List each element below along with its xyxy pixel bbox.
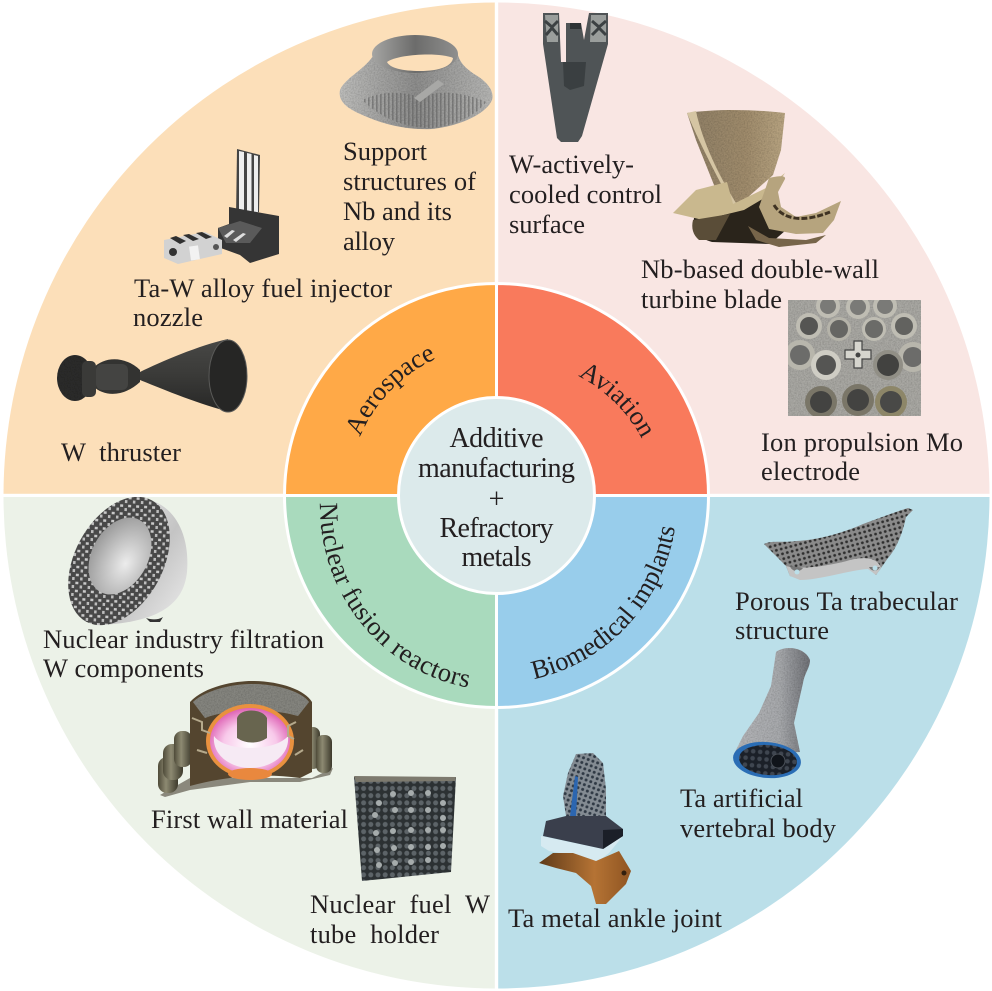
center title xyxy=(418,423,575,573)
center title: Additive xyxy=(450,423,544,454)
label: nuclear fuel W tube holder xyxy=(310,889,490,949)
icon: ion propulsion Mo electrode xyxy=(788,300,921,416)
center title: Refractory xyxy=(440,513,554,544)
label: nuclear filtration W components: W components xyxy=(43,653,204,683)
label: nuclear fuel W tube holder: tube holder xyxy=(310,919,439,949)
ring label: Aerospace: Aerospace xyxy=(348,349,434,437)
label: Nb support structures: alloy xyxy=(343,226,396,256)
icon: Ta-W fuel injector nozzle xyxy=(164,149,279,264)
label: Ta-W injector xyxy=(133,273,392,332)
panel: aerospace quadrant xyxy=(4,2,496,496)
label: ion propulsion Mo electrode xyxy=(761,427,963,486)
label: ion propulsion Mo electrode: Ion propulsion Mo xyxy=(761,427,963,457)
center circle xyxy=(398,398,594,594)
ring segment: aerospace xyxy=(284,284,496,496)
center title: manufacturing xyxy=(418,453,575,484)
panel: biomedical quadrant xyxy=(496,496,990,988)
icon: Nb support structure cone xyxy=(340,35,493,129)
icon: nuclear filtration W component xyxy=(47,479,191,643)
label: W thruster: W thruster xyxy=(61,437,181,467)
label: Ta artificial vertebral body: vertebral body xyxy=(680,813,837,843)
label: W-actively-cooled control surface xyxy=(509,149,662,239)
ring label: Nuclear fusion reactors: Nuclear fusion reactors xyxy=(320,503,469,687)
panel: inner application ring xyxy=(283,282,710,709)
center title: + xyxy=(489,484,504,515)
label: nuclear filtration W components: Nuclear industry filtration xyxy=(43,624,324,654)
label: W-actively-cooled control surface: W-actively- xyxy=(509,149,634,179)
label: nuclear fuel W tube holder: Nuclear fuel W xyxy=(310,889,490,919)
ring label: Aviation: Aviation xyxy=(578,364,651,438)
label: Nb support structures: structures of xyxy=(343,166,476,196)
icon: W thruster xyxy=(57,339,247,412)
label: Nb-based double-wall turbine blade: turbine blade xyxy=(641,284,782,314)
icon: first wall reactor xyxy=(158,681,333,797)
label: Nb support structures: Nb and its xyxy=(343,196,452,226)
ring label: Biomedical implants: Biomedical implants xyxy=(530,526,674,679)
label: porous Ta trabecular structure: structure xyxy=(735,615,829,645)
label: porous Ta trabecular structure xyxy=(735,586,958,645)
label: porous Ta trabecular structure: Porous Ta trabecular xyxy=(735,586,958,616)
label: W-actively-cooled control surface: surface xyxy=(509,209,585,239)
label: Nb support structures: Support xyxy=(343,136,428,166)
icon: nuclear fuel W tube holder xyxy=(354,776,456,881)
label: W-actively-cooled control surface: cooled control xyxy=(509,179,662,209)
label: nuclear filtration W components xyxy=(43,624,324,683)
label: Ta metal ankle joint: Ta metal ankle joint xyxy=(508,903,723,933)
ring segment: nuclear fusion reactors xyxy=(284,496,496,708)
label: Nb support structures xyxy=(343,136,476,256)
icon: porous Ta trabecular structure xyxy=(764,508,913,580)
panel: nuclear fusion quadrant xyxy=(4,479,496,988)
label: Ta-W injector: nozzle xyxy=(133,302,203,332)
icon: Ta artificial vertebral body xyxy=(732,648,810,781)
label: first wall material: First wall material xyxy=(151,804,348,834)
icon: W actively cooled control surface xyxy=(543,13,608,142)
label: Ta-W injector: Ta-W alloy fuel injector xyxy=(134,273,392,303)
ring segment: aviation xyxy=(496,284,708,496)
label: Ta artificial vertebral body: Ta artificial xyxy=(680,783,803,813)
center title: metals xyxy=(462,542,532,573)
label: Ta artificial vertebral body xyxy=(680,783,837,843)
ring segment: biomedical implants xyxy=(496,496,708,708)
label: ion propulsion Mo electrode: electrode xyxy=(761,456,860,486)
label: Nb-based double-wall turbine blade xyxy=(641,254,879,314)
icon: Nb double-wall turbine blade xyxy=(673,110,841,247)
panel: aviation quadrant xyxy=(496,2,990,496)
icon: Ta metal ankle joint xyxy=(539,753,631,904)
label: Nb-based double-wall turbine blade: Nb-based double-wall xyxy=(641,254,879,284)
